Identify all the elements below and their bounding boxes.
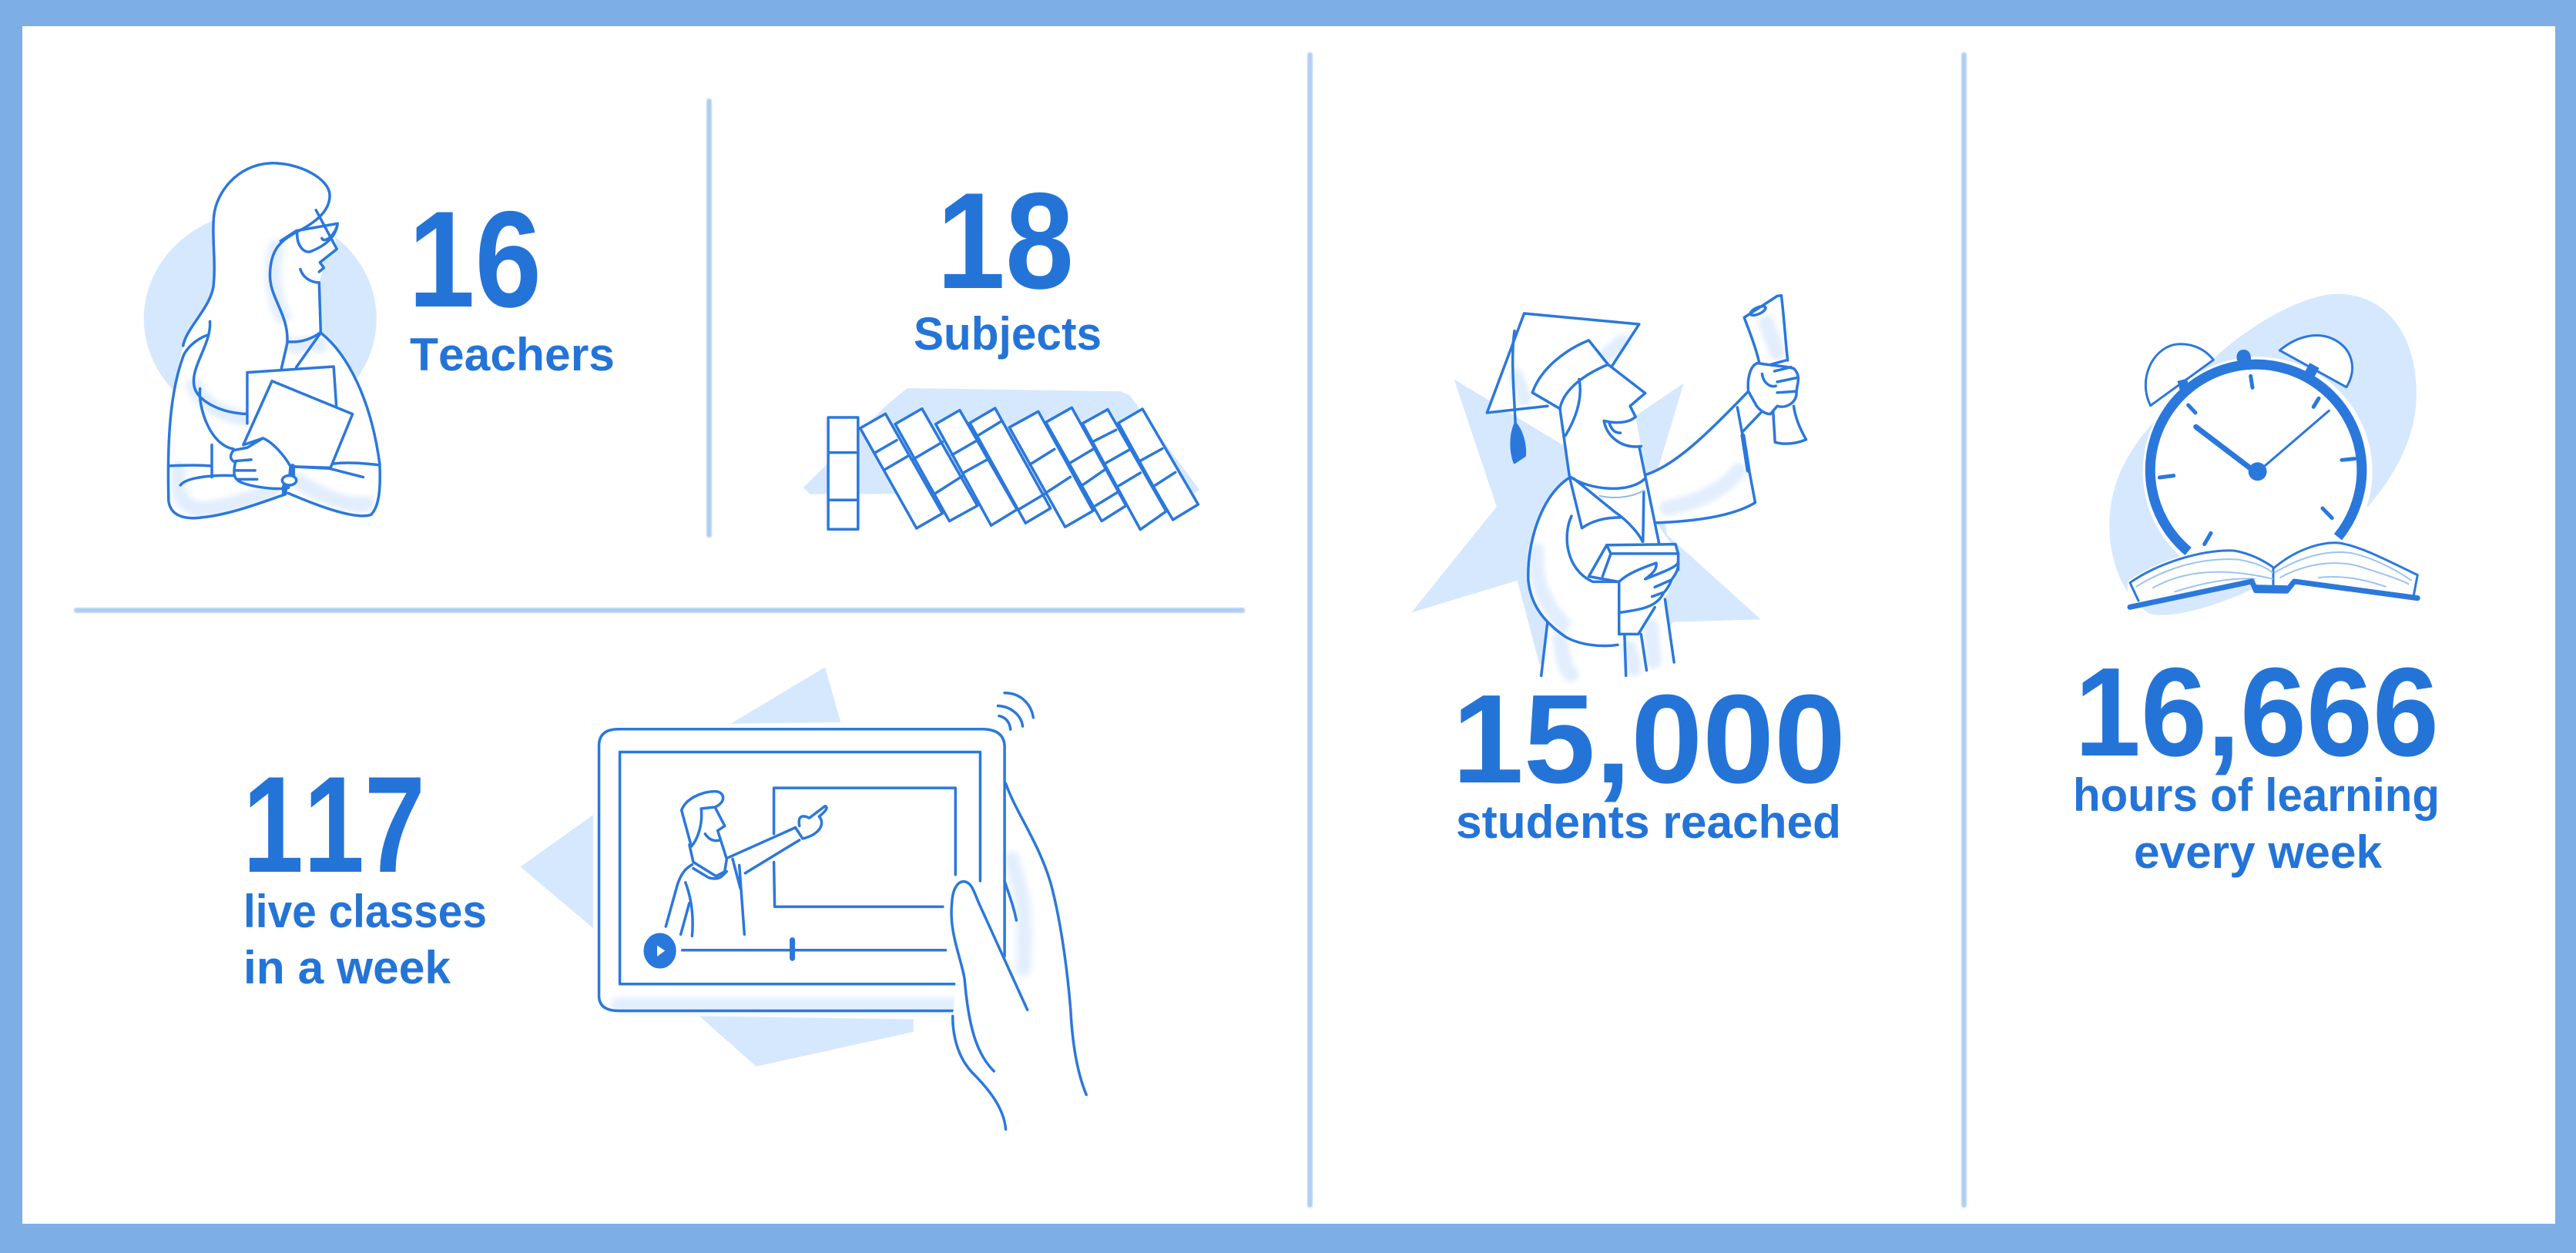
divider: students and hours [1961,52,1967,1208]
mortarboard cap [1487,313,1639,462]
panel: teachers [144,163,615,518]
divider: top and bottom left [74,608,1245,613]
illustration: hand holding tablet with video lesson [521,667,1086,1129]
number: 15,000: 15,000 [1452,668,1846,809]
clock rim [2150,364,2362,551]
panel: live classes [243,667,1086,1129]
ticks [2159,376,2355,544]
label: hours of learning every week: every week [2134,826,2383,878]
bells [2145,336,2353,406]
play button [645,934,675,967]
number: 117: 117 [243,748,425,901]
video progress bar [683,949,946,951]
label: live classes in a week: in a week [243,942,451,993]
illustration: graduate holding diploma and book [1411,296,1806,675]
presenter [666,792,827,936]
hands [2196,427,2251,468]
panel: students reached [1411,296,1846,848]
label: students reached: students reached [1456,796,1841,848]
divider: left and students [1307,52,1313,1208]
open book [2130,543,2417,607]
label: live classes in a week [243,886,487,993]
hand [951,783,1086,1129]
label: live classes in a week: live classes [243,886,487,937]
diploma and raised hand [1742,296,1806,444]
panel: subjects [803,164,1199,530]
illustration: row of leaning books [803,388,1199,530]
number: 18: 18 [937,164,1074,317]
book and hand [1588,544,1679,581]
gown and arm [1528,478,1655,646]
illustration: teacher holding books [144,163,380,518]
divider: teachers and subjects [706,99,712,538]
number: 16: 16 [408,183,542,336]
label: Teachers: Teachers [410,329,615,380]
head [1560,364,1645,447]
top knob [2236,350,2251,362]
label: hours of learning every week [2073,769,2440,878]
wifi signal [998,693,1033,729]
label: Subjects: Subjects [914,308,1102,360]
number: 16,666: 16,666 [2075,642,2439,782]
panel: hours of learning [2073,294,2440,878]
illustration: alarm clock and open book [2109,294,2417,615]
label: hours of learning every week: hours of learning [2073,769,2440,821]
